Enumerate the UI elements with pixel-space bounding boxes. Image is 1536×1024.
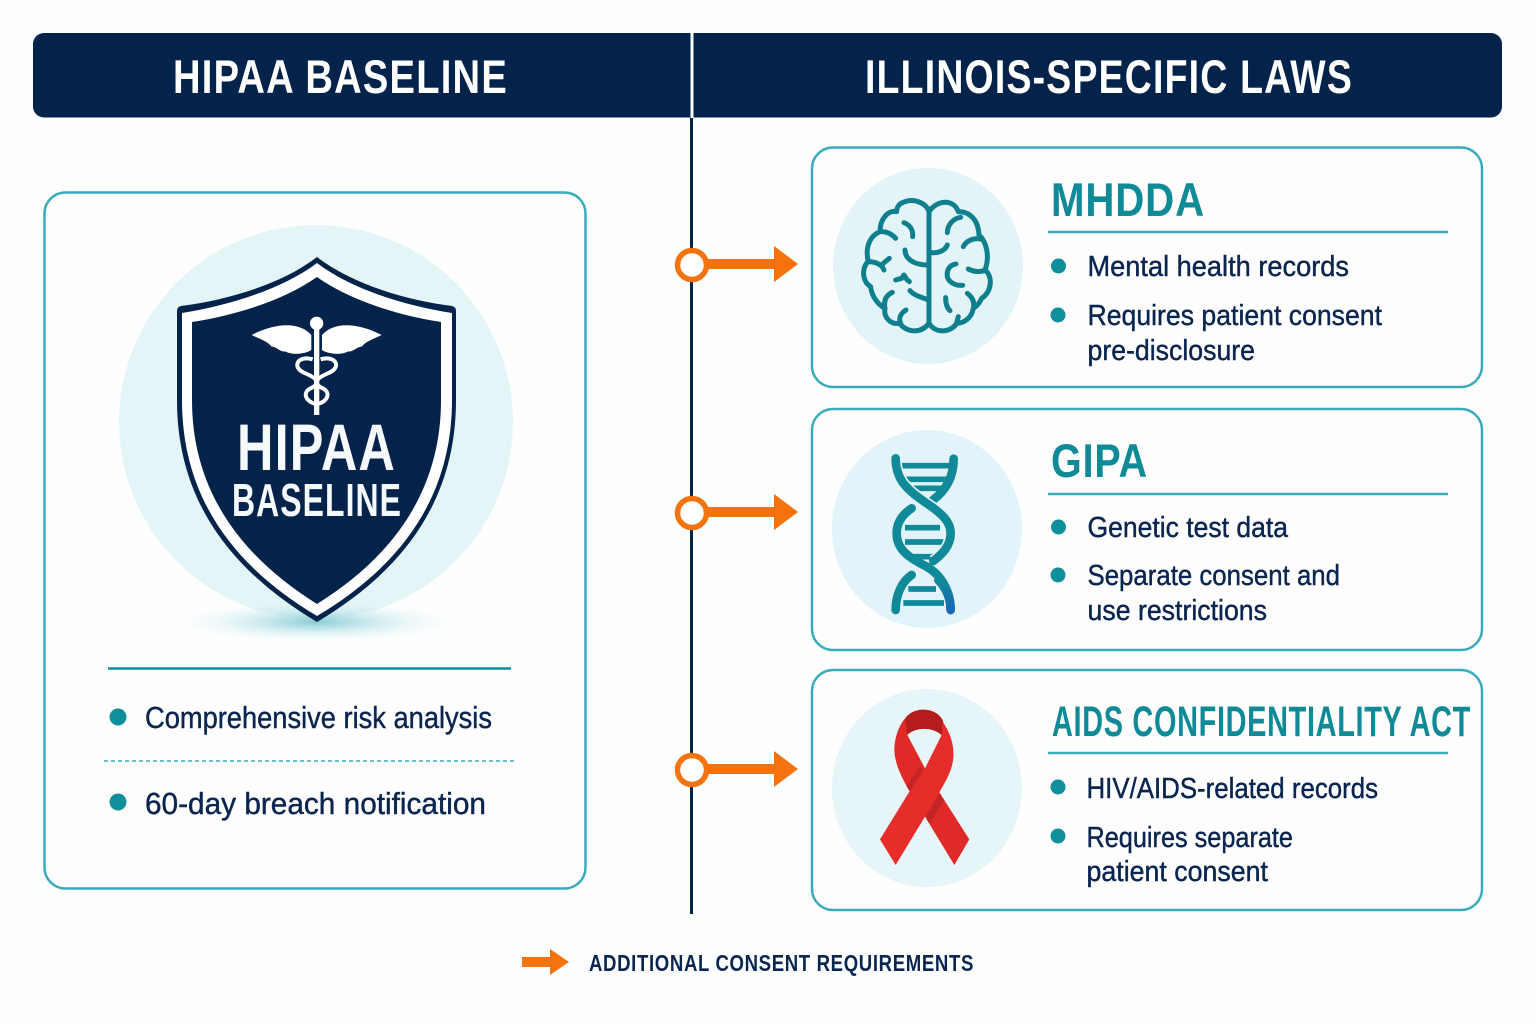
panel: MHDDA bbox=[812, 148, 1482, 387]
bullet: risk analysis: Comprehensive risk analysis bbox=[145, 700, 492, 735]
bullet: requires separate consent: Requires separate bbox=[1086, 822, 1293, 854]
arrow: to AIDS Confidentiality Act bbox=[678, 751, 798, 787]
bullet: breach notification: 60-day breach notification bbox=[145, 786, 486, 821]
shield label: HIPAA bbox=[237, 410, 396, 484]
bullet: requires patient consent: pre-disclosure bbox=[1088, 335, 1255, 367]
bullet: requires patient consent bbox=[1050, 300, 1382, 367]
icon background circle bbox=[119, 225, 513, 619]
icon: brain bbox=[833, 168, 1023, 364]
arrow: to MHDDA bbox=[678, 246, 798, 282]
heading: GIPA: GIPA bbox=[1051, 434, 1148, 487]
heading: HIPAA Baseline: HIPAA BASELINE bbox=[173, 50, 508, 103]
heading: Illinois-Specific Laws: ILLINOIS-SPECIFIC LAWS bbox=[865, 50, 1353, 103]
icon: DNA helix bbox=[832, 430, 1022, 628]
bullet: requires patient consent: Requires patient consent bbox=[1088, 300, 1382, 332]
icon: HIPAA shield: BASELINE bbox=[232, 474, 402, 526]
bullet: separate consent: Separate consent and bbox=[1088, 560, 1340, 592]
bullet: requires separate consent bbox=[1050, 822, 1293, 888]
vertical timeline line bbox=[690, 117, 693, 914]
legend bbox=[522, 949, 974, 976]
icon: HIPAA shield bbox=[177, 257, 456, 622]
bullet: separate consent: use restrictions bbox=[1088, 595, 1267, 627]
panel: HIPAA baseline bbox=[44, 192, 586, 888]
panel: GIPA bbox=[812, 409, 1482, 650]
heading: MHDDA: MHDDA bbox=[1051, 173, 1205, 226]
legend: ADDITIONAL CONSENT REQUIREMENTS bbox=[589, 950, 974, 976]
bullet: HIV/AIDS records: HIV/AIDS-related records bbox=[1086, 773, 1378, 805]
bullet: requires separate consent: patient consent bbox=[1086, 856, 1268, 888]
bullet: mental health records: Mental health records bbox=[1088, 251, 1349, 283]
header bar bbox=[33, 33, 1502, 118]
bullet: separate consent bbox=[1050, 560, 1340, 627]
panel: AIDS Confidentiality Act bbox=[812, 670, 1482, 910]
bullet: genetic test data: Genetic test data bbox=[1088, 512, 1289, 544]
arrow: to GIPA bbox=[678, 494, 798, 530]
icon: caduceus bbox=[252, 317, 382, 415]
shield ground shadow bbox=[176, 602, 456, 642]
icon: red ribbon bbox=[832, 689, 1022, 887]
